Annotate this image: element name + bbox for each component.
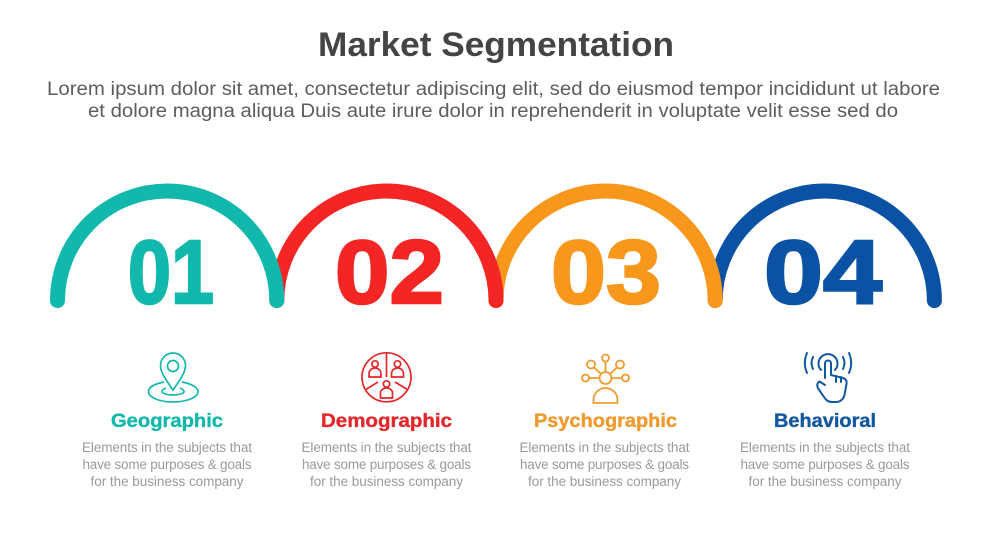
description: Psychographic: Elements in the subjects that xyxy=(520,440,690,455)
number 04: 04 xyxy=(764,223,882,323)
subtitle text block: et dolore magna aliqua Duis aute irure dolor in reprehenderit in voluptate velit esse sed do xyxy=(88,101,898,122)
heading: Demographic: Demographic xyxy=(321,411,452,432)
heading: Psychographic: Psychographic xyxy=(534,411,677,432)
subtitle text block xyxy=(47,79,940,122)
description: Psychographic: have some purposes & goals xyxy=(520,457,689,472)
arc: step 2 red xyxy=(277,191,496,301)
heading: Geographic: Geographic xyxy=(111,411,223,432)
arc: step 1 teal xyxy=(58,191,277,301)
description: Demographic xyxy=(302,440,472,489)
icon: map pin xyxy=(148,353,198,402)
subtitle text block: Lorem ipsum dolor sit amet, consectetur adipiscing elit, sed do eiusmod tempor incididunt ut labore xyxy=(47,79,940,100)
description: Geographic: for the business company xyxy=(90,474,244,489)
number 03: 03 xyxy=(551,223,661,323)
icon: tapping hand xyxy=(805,353,851,402)
arc: step 3 orange xyxy=(496,191,715,301)
description: Geographic: have some purposes & goals xyxy=(82,457,252,472)
description: Behavioral xyxy=(740,440,910,489)
description: Demographic: for the business company xyxy=(310,474,463,489)
description: Psychographic: for the business company xyxy=(528,474,681,489)
description: Geographic xyxy=(82,440,252,489)
icon: segmented people circle xyxy=(362,353,411,402)
description: Psychographic xyxy=(520,440,690,489)
description: Demographic: have some purposes & goals xyxy=(302,457,471,472)
description: Demographic: Elements in the subjects that xyxy=(302,440,472,455)
description: Geographic: Elements in the subjects that xyxy=(82,440,252,455)
arc: step 4 blue xyxy=(715,191,934,301)
number 01: 01 xyxy=(128,223,214,323)
icon: person with connected nodes xyxy=(582,354,629,403)
title: Market Segmentation xyxy=(318,26,674,64)
heading: Behavioral: Behavioral xyxy=(774,411,876,432)
description: Behavioral: for the business company xyxy=(748,474,902,489)
description: Behavioral: have some purposes & goals xyxy=(740,457,910,472)
number 02: 02 xyxy=(335,223,444,323)
description: Behavioral: Elements in the subjects that xyxy=(740,440,910,455)
